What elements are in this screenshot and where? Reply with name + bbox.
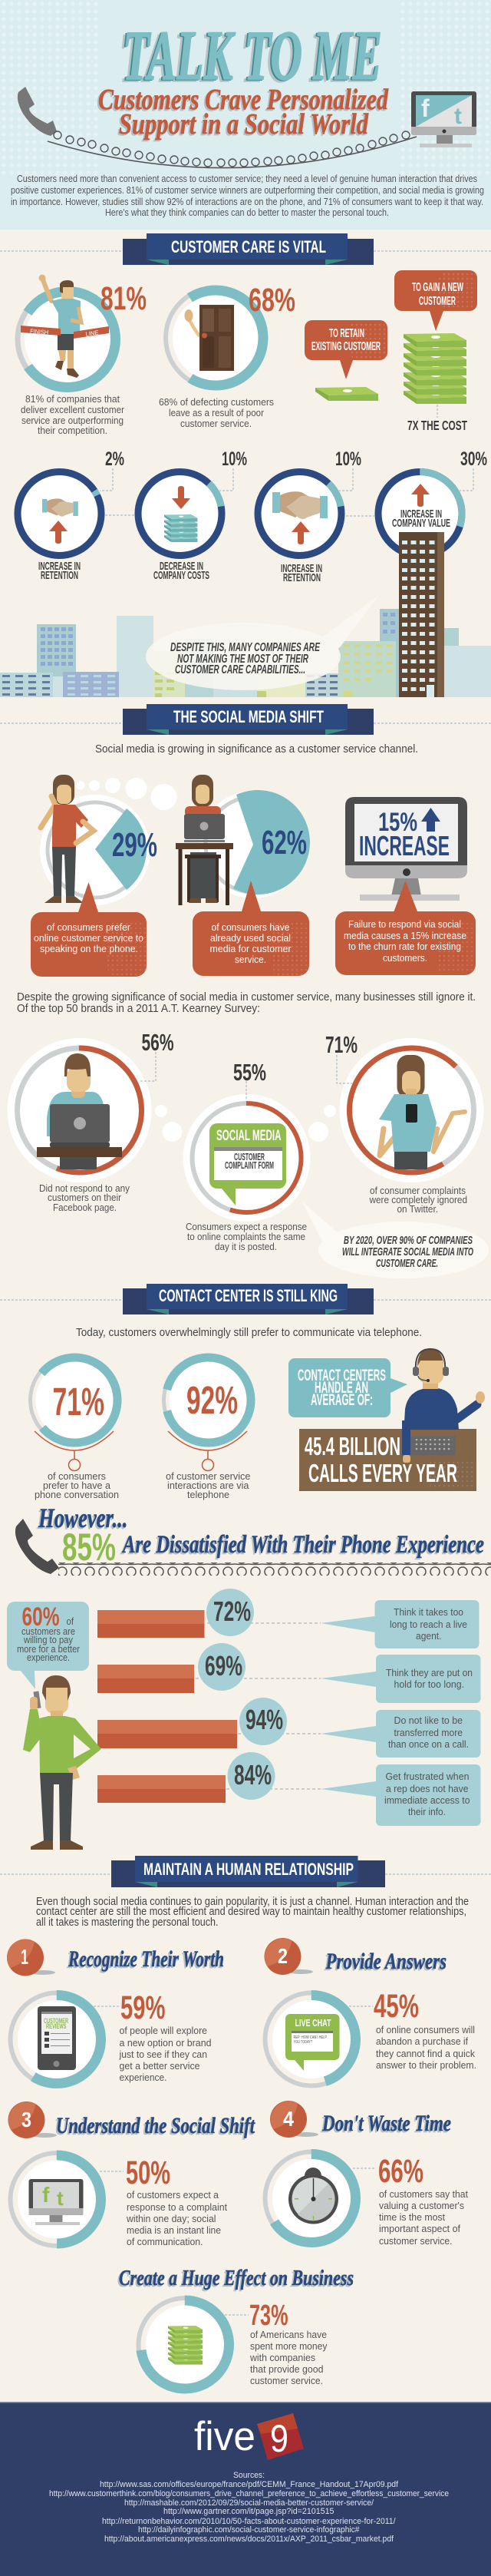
callout: 60 percent willing to pay: 60% [21,1602,60,1632]
section ribbon: customer care [0,233,491,265]
step 4: do not waste time: Don't Waste Time [321,2111,451,2136]
callout: contact centers handle: AVERAGE OF: [311,1391,373,1409]
figure: man at laptop [37,1053,122,1169]
caption: 56 percent [39,1183,130,1213]
caption: phone conversation: prefer to have a [43,1480,110,1491]
icon: monitor with social logos: f [42,2183,50,2207]
text: 66 percent: time is the most [379,2212,446,2223]
caption: DECREASE IN [160,560,203,573]
text: 59 percent: get a better service [120,2061,200,2072]
icon: arrow up [292,521,310,544]
callout: 60 percent willing to pay: willing to pay [23,1635,74,1645]
icon: tablet with reviews: REVIEWS [46,2022,66,2030]
caption: COMPANY COSTS [153,569,209,582]
sources list: http://dailyinfographic.com/social-customer-service-infographic# [138,2525,359,2535]
bar: 84 percent [97,1752,321,1803]
callout: transferred [321,1710,480,1758]
section ribbon: customer care: CUSTOMER CARE IS VITAL [171,237,326,256]
text: 45 percent [376,2025,476,2071]
callout: gain a new customer: CUSTOMER [419,295,456,308]
callout: retain existing customer [305,320,387,379]
logo: five9 [194,2413,304,2460]
text: despite growing significance [17,990,476,1015]
caption: COMPANY VALUE [392,517,450,530]
speech bubble: by 2020 [302,1202,489,1278]
callout: on hold too long: Think they are put on [386,1668,473,1678]
ring: 71 percent twitter [325,1025,491,1195]
sources list: http://about.americanexpress.com/news/docs/2011x/AXP_2011_csbar_market.pdf [104,2535,394,2544]
icon: teal money stack [164,514,197,542]
icon: social media complaint form [209,1123,286,1205]
callout: 29 percent prefer online: speaking on the phone. [40,944,138,954]
callout: 29 percent prefer online: online customer service to [34,933,143,944]
icon: tablet with reviews: CUSTOMER [44,2017,68,2025]
speech bubble: despite this [146,595,379,690]
caption: 55 percent: day it is posted. [215,1242,277,1252]
icon: runner at finish line [21,275,109,378]
callout: too long to reach agent: agent. [416,1631,442,1642]
stat: 66%: 66% [378,2153,423,2190]
intro text [11,174,484,218]
icon: stack of money bills [404,333,466,404]
ring chart: 68 percent with door [150,272,295,404]
icon: stopwatch [288,2168,338,2224]
caption: 68 percent: customer service. [180,418,252,429]
callout: frustrated [321,1764,480,1826]
icon: monitor with social logos: t [57,2187,64,2210]
subtitle [98,84,389,141]
icon: runner at finish line: LINE [85,329,99,338]
stat: 73%: 73% [249,2300,288,2332]
callout: 60 percent willing to pay: more for a better [17,1644,80,1655]
text: 50 percent: of customers expect a [127,2190,219,2201]
text: 66 percent [379,2189,469,2247]
text: human interaction: all it takes is mastering the personal touch. [36,1916,218,1929]
figure: man on phone [23,1675,101,1850]
stat: 2%: 2% [105,448,124,470]
icon: green money stack [168,2326,203,2365]
bar: 94 percent: 94% [246,1704,283,1735]
icon: live chat bubble [285,2014,339,2071]
icon: handshake small [42,498,78,517]
footer panel [0,2402,491,2576]
text: 59 percent: experience. [120,2072,167,2083]
caption: 56 percent: Did not respond to any [39,1183,130,1194]
icon: dark handset [15,1519,59,1574]
callout: 29 percent prefer online: of consumers prefer [47,922,130,933]
sources list: http://mashable.com/2012/09/29/social-media-better-customer-service/ [124,2498,374,2508]
section ribbon: social media shift: THE SOCIAL MEDIA SHIFT [173,707,324,726]
text: despite growing significance: Of the top 50 brands in a 2011 A.T. Kearney Survey: [17,1002,260,1015]
text: 45 percent: abandon a purchase if [376,2036,468,2047]
step 4: do not waste time: 4 [283,2107,294,2131]
caption: INCREASE IN [400,508,442,521]
stat: 62%: 62% [262,824,307,861]
callout: frustrated: a rep does not have [386,1784,469,1794]
bar: 84 percent: 84% [234,1759,272,1791]
subtitle: Customers Crave Personalized [98,84,389,116]
stat: 56%: 56% [141,1029,173,1056]
ring: 56 percent facebook [8,1029,173,1182]
text: 45 percent: they cannot find a quick [376,2049,476,2059]
ring: 2 percent increase in retention [2,448,124,582]
stat: 68%: 68% [249,282,295,319]
icon: monitor with facebook and twitter [411,91,476,147]
figure: call center agent [402,1349,485,1463]
ring: 66 percent stopwatch [265,2151,423,2245]
callout: transferred: than once on a call. [388,1739,469,1750]
callout: frustrated: their info. [408,1807,446,1817]
icon: handshake large [272,491,328,519]
intro text: Here's what they think companies can do better to master the personal touch. [105,207,389,218]
section ribbon: human relationship [0,1856,491,1887]
caption: 71 percent: on Twitter. [397,1204,438,1215]
text: 73 percent: customer service. [250,2376,323,2386]
callout: too long to reach agent: long to reach a live [390,1619,467,1630]
callout: on hold too long [321,1655,480,1703]
icon: coiled cord [48,131,417,168]
ring: 10 percent decrease in costs [120,448,247,582]
step 1: recognize their worth: Recognize Their Worth [68,1946,224,1972]
icon: social media complaint form: COMPLAINT FORM [225,1160,274,1171]
text: 73 percent [249,2330,328,2386]
header panel [0,0,491,230]
icon: monitor with facebook and twitter: t [454,104,462,129]
callout: on hold too long: hold for too long. [394,1679,464,1690]
caption: RETENTION [283,571,321,584]
ring: 92 percent telephone [157,1348,260,1471]
callout: 62 percent used social: service. [235,954,266,965]
ring: 10 percent increase in retention [240,448,361,584]
logo: five9: five [194,2414,255,2459]
text: 45 percent: answer to their problem. [376,2060,476,2071]
speech bubble: by 2020: CUSTOMER CARE. [376,1257,438,1270]
intro line: telephone: Today, customers overwhelmingly still prefer to communicate via telephone. [76,1326,422,1339]
thought bubbles right [308,1105,336,1142]
icon: arrow up [49,521,68,544]
sources list: http://www.customerthink.com/blog/consumers_drive_channel_preference_to_achieve_effortless_customer_service [49,2489,449,2498]
icon: arrow up navy [421,808,440,832]
ring: 45 percent live chat [265,1988,419,2085]
heading: create a huge effect: Create a Huge Effect on Business [119,2266,354,2290]
step 1: recognize their worth [7,1939,224,1976]
section ribbon: contact center [0,1284,491,1314]
panel: 45.4 billion calls: 45.4 BILLION [305,1432,400,1460]
text: 50 percent: of communication. [127,2237,203,2247]
caption: 55 percent: Consumers expect a response [186,1222,307,1232]
callout: too long to reach agent: Think it takes too [394,1607,463,1618]
callout: 29 percent prefer online [31,882,147,977]
step 3: understand the social shift [8,2101,255,2138]
text: 59 percent [119,2025,212,2083]
callout: frustrated: Get frustrated when [385,1771,470,1782]
text: 45 percent: of online consumers will [376,2025,475,2035]
stat: 71%: 71% [52,1380,104,1424]
bar: 69 percent [97,1643,321,1693]
callout: 60 percent willing to pay [7,1602,89,1689]
caption: 56 percent: Facebook page. [53,1202,117,1213]
icon: live chat bubble: LIVE CHAT [295,2017,331,2029]
callout: 15 percent churn: media causes a 15% increase [344,931,466,941]
caption: 71 percent: were completely ignored [369,1195,467,1205]
callout: 15 percent churn: to the churn rate for existing [348,941,461,952]
ring: 50 percent social monitor [11,2153,170,2246]
icon: single money bill [315,387,378,401]
callout: 62 percent used social [193,881,309,976]
callout: contact centers handle: HANDLE AN [315,1379,368,1397]
caption [38,560,81,582]
callout: gain a new customer [394,270,477,331]
caption: 68 percent [159,397,274,429]
sources list: http://returnonbehavior.com/2010/10/50-facts-about-customer-experience-for-2011/ [102,2517,396,2526]
text: 73 percent: of Americans have [250,2330,327,2340]
ring: 59 percent reviews [11,1989,166,2085]
subtitle: Support in a Social World [119,108,369,141]
text: 66 percent: valuing a customer's [379,2201,464,2211]
step 4: do not waste time [270,2101,451,2138]
caption: 55 percent: to online complaints the same [187,1232,305,1242]
heading: however: However... [38,1503,127,1533]
stat: 10%: 10% [335,448,361,470]
callout: 62 percent used social: already used social [210,933,291,944]
callout: contact centers handle [288,1358,407,1417]
callout: 60 percent willing to pay: of [66,1616,74,1627]
stat: 81%: 81% [101,280,147,317]
icon: office tower [399,532,444,697]
text: 73 percent: that provide good [250,2364,324,2375]
callout: 15 percent churn: Failure to respond via social [348,919,461,930]
bar: 72 percent [97,1589,321,1638]
intro line: social media: Social media is growing in significance as a customer service channel. [95,742,418,756]
callout: 62 percent used social: of consumers have [212,922,290,933]
callout: retain existing customer: EXISTING CUSTOMER [311,340,381,353]
ring: 71 percent phone conversation [15,1340,135,1471]
step 1: recognize their worth: 1 [21,1945,28,1969]
caption: telephone: telephone [187,1490,229,1500]
callout: 62 percent used social: media for customer [210,944,292,954]
bar: 94 percent [97,1698,321,1748]
caption: RETENTION [41,569,78,582]
text: 50 percent [126,2190,228,2247]
stat: 15%: 15% [378,808,417,837]
logo: five9: 9 [270,2417,288,2460]
text: human interaction [36,1895,469,1929]
icon: monitor with facebook and twitter: f [421,94,430,122]
icon: arrow up [411,484,430,507]
text: 50 percent: response to a complaint [127,2202,228,2213]
caption [392,508,450,530]
stat: 59%: 59% [120,1989,166,2026]
icon: social media complaint form: CUSTOMER [234,1152,265,1162]
skyline [0,609,491,697]
caption: phone conversation [35,1471,119,1500]
caption: 81 percent [21,394,124,436]
text: 66 percent: customer service. [379,2236,453,2247]
pie chart: 29 percent [40,795,157,905]
text: 50 percent: within one day; social [126,2214,216,2224]
step 3: understand the social shift: Understand the Social Shift [56,2113,255,2138]
figure: woman with smartphone [379,1055,465,1169]
stat: 10%: 10% [222,448,247,470]
callout: 15 percent churn: customers. [383,953,427,964]
section ribbon: human relationship: MAINTAIN A HUMAN RELATIONSHIP [143,1860,354,1879]
stat: 45%: 45% [374,1988,419,2025]
caption: telephone: of customer service [166,1471,251,1482]
stat: 29%: 29% [112,826,157,864]
thought bubbles [77,778,176,810]
caption: telephone: interactions are via [167,1480,249,1491]
figure: woman on phone [41,775,94,903]
section ribbon: social media shift [0,704,491,735]
bar: 69 percent: 69% [205,1650,242,1682]
caption: 68 percent: 68% of defecting customers [159,397,274,408]
text: 59 percent: of people will explore [120,2025,207,2036]
caption: phone conversation: phone conversation [35,1490,119,1500]
callout: 60 percent willing to pay: customers are [21,1626,75,1637]
icon: social media complaint form: SOCIAL MEDIA [216,1128,282,1144]
caption: 71 percent [369,1185,467,1215]
caption: 56 percent: customers on their [48,1192,121,1203]
text: 66 percent: important aspect of [379,2224,461,2234]
caption: INCREASE IN [281,562,322,575]
caption: 71 percent: of consumer complaints [370,1185,466,1196]
caption: 68 percent: leave as a result of poor [169,408,264,418]
caption: 81 percent: their competition. [38,425,107,436]
sources list: Sources: [233,2471,265,2480]
icon: tablet with reviews [38,2006,76,2070]
figure: woman at laptop [176,775,233,905]
callout: 15 percent churn [335,881,476,975]
stat: 92%: 92% [186,1378,238,1422]
icon: long coiled cord [58,1562,491,1576]
icon: telephone handset [18,87,57,136]
stat: 50%: 50% [126,2154,170,2191]
text: 73 percent: spent more money [250,2341,328,2352]
caption [153,560,209,582]
icon: arrow down [172,486,190,509]
ring: 30 percent with building [378,448,487,697]
callout: too long to reach agent [321,1600,479,1648]
caption: 55 percent [186,1222,307,1252]
step 3: understand the social shift: 3 [21,2108,31,2131]
ring: 73 percent money [138,2298,288,2391]
step 2: provide answers: 2 [278,1944,288,1968]
caption: phone conversation: of consumers [48,1471,106,1482]
bar: 72 percent: 72% [213,1596,251,1627]
step 2: provide answers: Provide Answers [325,1949,447,1974]
callout: frustrated: immediate access to [384,1795,470,1806]
text: 59 percent: a new option or brand [120,2038,212,2049]
ring: 55 percent same day [183,1059,310,1222]
text: 50 percent: media is an instant line [127,2225,221,2236]
stat: 55%: 55% [233,1059,266,1086]
section ribbon: contact center: CONTACT CENTER IS STILL KING [159,1286,338,1305]
stat: 71%: 71% [325,1031,358,1058]
callout: 60 percent willing to pay: experience. [27,1652,70,1663]
callout: transferred: transferred more [394,1728,463,1738]
callout: transferred: Do not like to be [394,1715,463,1726]
icon: door and hand [184,305,234,371]
icon: monitor 15 percent increase [345,797,467,901]
speech bubble: despite this: CUSTOMER CARE CAPABILITIES... [175,663,305,676]
icon: live chat bubble: REP: HOW CAN I HELP [293,2035,328,2040]
text: 66 percent: of customers say that [379,2189,469,2200]
caption: 81 percent: service are outperforming [21,415,124,426]
sources list: http://www.sas.com/offices/europe/france/pdf/CEMM_France_Handout_17Apr09.pdf [100,2480,399,2489]
icon: monitor with social logos [29,2179,83,2225]
caption: INCREASE IN [38,560,81,573]
text: 73 percent: with companies [249,2353,315,2363]
icon: live chat bubble: YOU TODAY? [293,2040,312,2045]
panel: 45.4 billion calls [299,1429,476,1491]
sources list [49,2471,449,2544]
stat: 85%: 85% [62,1526,116,1569]
callout: contact centers handle: CONTACT CENTERS [298,1367,386,1384]
callout: retain existing customer: TO RETAIN [329,327,364,340]
sources list: http://www.gartner.com/it/page.jsp?id=2101515 [163,2507,334,2516]
speech bubble: despite this: NOT MAKING THE MOST OF THEIR [177,653,309,666]
thought bubbles left [155,1105,183,1142]
pie chart: 62 percent [199,790,310,898]
caption: 81 percent: 81% of companies that [25,394,120,405]
caption [281,562,322,584]
icon: runner at finish line: FINISH [30,328,49,336]
ring chart: 81 percent with runner [1,273,147,406]
label: seven times the cost [407,405,467,433]
text: 59 percent: just to see if they can [119,2049,207,2060]
speech bubble: despite this: DESPITE THIS, MANY COMPANIES ARE [170,641,320,654]
caption: 81 percent: deliver excellent customer [21,405,124,415]
caption: telephone [166,1471,251,1500]
step 2: provide answers [264,1938,447,1975]
